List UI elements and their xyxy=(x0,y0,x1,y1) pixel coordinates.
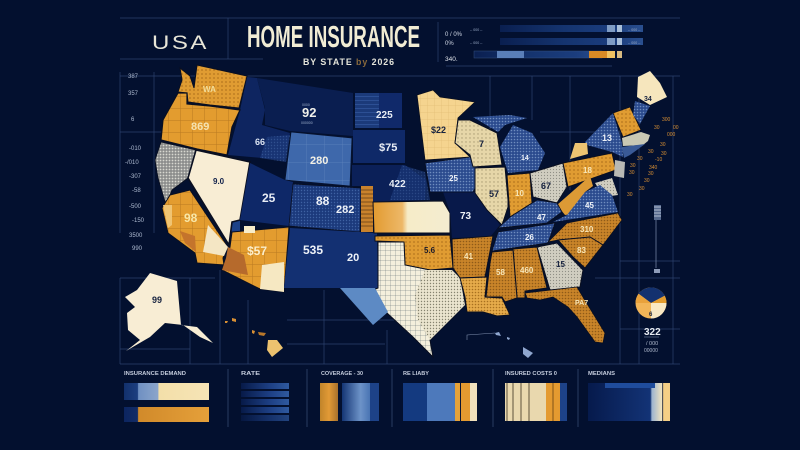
state: Mississippi xyxy=(486,250,517,302)
state: Kentucky: 47 xyxy=(537,213,546,222)
state: Washington: WA xyxy=(203,85,216,94)
state: New Mexico xyxy=(284,228,378,288)
state: Virginia: 45 xyxy=(585,201,594,210)
country label: USA xyxy=(152,33,209,54)
pie chart xyxy=(636,287,667,318)
top right range bars: 0% xyxy=(445,41,454,47)
legend: coverage xyxy=(320,371,379,421)
state: Minnesota xyxy=(417,90,475,160)
state: Texas xyxy=(340,242,465,357)
left axis labels: -58 xyxy=(132,188,141,194)
state: Montana xyxy=(257,78,353,136)
state: Montana: 92 xyxy=(302,105,316,120)
left axis labels: 357 xyxy=(128,91,139,97)
state: South Dakota xyxy=(353,130,405,163)
state: Virginia xyxy=(553,185,618,222)
pie value: / 000 xyxy=(646,341,658,347)
left axis labels: -/010 xyxy=(125,160,139,166)
state: Nevada: 9.0 xyxy=(213,177,225,186)
top right range bars: -- 000 -- xyxy=(470,41,483,45)
state: North Carolina xyxy=(548,213,622,245)
state: Arkansas xyxy=(452,236,493,278)
state: Maine xyxy=(633,71,667,124)
state: western New York strip xyxy=(570,143,588,159)
state: Colorado: 282 xyxy=(336,204,354,216)
state: South Carolina xyxy=(558,237,603,268)
state: Pennsylvania: 18 xyxy=(583,166,592,175)
state: New York: 13 xyxy=(602,133,612,143)
east coast callouts: 00 xyxy=(673,125,679,131)
east coast callouts: 000 xyxy=(667,132,676,138)
state: Washington xyxy=(178,65,247,108)
state: Iowa xyxy=(425,157,483,192)
state: Oklahoma xyxy=(375,235,453,270)
state: Tennessee: 26 xyxy=(525,233,534,242)
state: Nebraska xyxy=(352,165,430,202)
state: Louisiana xyxy=(460,277,510,316)
state: Missouri: 73 xyxy=(460,211,472,222)
top right range bars xyxy=(445,25,643,63)
subtitle: BY STATE by 2026 xyxy=(303,57,395,68)
state: Alabama xyxy=(513,247,547,298)
state: Pennsylvania xyxy=(563,153,616,187)
east coast callouts: 30 xyxy=(654,125,660,131)
left axis labels: 3500 xyxy=(129,233,143,239)
state: Indiana xyxy=(507,173,532,217)
state: Indiana: 10 xyxy=(515,189,524,198)
east coast callouts: 30 xyxy=(637,156,643,162)
east coast callouts: 30 xyxy=(630,163,636,169)
top right range bars: 0 / 0% xyxy=(445,32,463,38)
state: Kansas xyxy=(373,201,450,233)
east coast callouts: 30 xyxy=(644,178,650,184)
state: Missouri xyxy=(443,192,500,238)
state: Montana: 0000 xyxy=(302,103,310,107)
east coast callouts: 30 xyxy=(660,142,666,148)
top right range bars: -- 000 -- xyxy=(628,41,641,45)
top right range bars: 340. xyxy=(445,56,458,63)
east coast callouts: 300 xyxy=(662,117,671,123)
left axis labels xyxy=(125,74,145,252)
state: sliver of blue beside Nevada xyxy=(228,220,240,245)
state: Delaware and Maryland xyxy=(595,178,618,197)
state: Arizona: $57 xyxy=(247,244,267,258)
state: North Dakota xyxy=(355,93,402,128)
state: Vermont and New Hampshire xyxy=(613,107,641,137)
state: Alaska: 99 xyxy=(152,295,162,305)
state: New Mexico: 535 xyxy=(303,243,323,257)
state: Arizona xyxy=(222,226,289,292)
legend: coverage: COVERAGE - 30 xyxy=(321,371,363,377)
state: Connecticut xyxy=(622,144,645,158)
title block xyxy=(152,19,420,68)
state: North Dakota: 225 xyxy=(376,110,393,121)
state: Nevada xyxy=(188,150,250,245)
state: Arkansas: 41 xyxy=(464,252,473,261)
state: West Virginia xyxy=(557,176,593,215)
state: Southern California xyxy=(162,190,228,265)
left axis labels: -150 xyxy=(132,218,145,224)
grid lines xyxy=(120,18,680,364)
east coast callouts: 30 xyxy=(648,149,654,155)
state: Alabama: 460 xyxy=(520,266,534,275)
state: Colorado xyxy=(289,184,361,232)
left axis labels: -500 xyxy=(129,204,142,210)
state: Montana: 000000 xyxy=(301,121,313,125)
state: Illinois xyxy=(475,167,508,225)
state: Utah xyxy=(240,163,293,226)
state: Hawaii xyxy=(225,318,283,357)
state: New Mexico: 20 xyxy=(347,252,359,264)
legend: insurance premium: INSURANCE DEMAND xyxy=(124,371,186,377)
legend: insurance premium xyxy=(124,371,209,422)
east coast callouts xyxy=(627,117,679,198)
state: Utah: 25 xyxy=(262,191,276,205)
state: Michigan upper xyxy=(473,115,527,132)
state: Southern California: 98 xyxy=(184,211,198,225)
east coast callouts: 30 xyxy=(627,192,633,198)
state: North Carolina: 310 xyxy=(580,225,594,234)
state: Florida: PA7 xyxy=(575,300,588,307)
state: Kentucky xyxy=(498,200,562,228)
state: Oregon: 869 xyxy=(191,121,209,133)
state: Oregon xyxy=(161,93,240,155)
state: Iowa: 25 xyxy=(449,174,458,183)
left axis labels: 6 xyxy=(131,117,135,123)
state: Georgia xyxy=(537,243,583,290)
state: New Jersey xyxy=(614,160,625,178)
state: Illinois: 57 xyxy=(489,189,499,199)
pie value: 322 xyxy=(644,327,661,338)
left axis labels: -010 xyxy=(129,146,142,152)
state: Northern California xyxy=(155,142,196,205)
state: Idaho: 66 xyxy=(255,137,265,147)
east coast callouts: -10 xyxy=(655,157,662,163)
pie value xyxy=(644,327,661,354)
state: Maine: 34 xyxy=(644,96,652,103)
legend: rate xyxy=(241,371,289,421)
legend: insured costs: INSURED COSTS 0 xyxy=(505,371,557,377)
legend: liability: RE LIABY xyxy=(403,371,429,377)
left axis labels: -307 xyxy=(129,174,142,180)
main heading: HOME INSURANCE xyxy=(247,19,420,54)
state: Oklahoma: 5.6 xyxy=(424,246,436,255)
state: Idaho xyxy=(228,77,290,162)
legend: insured costs xyxy=(505,371,567,421)
east coast callouts: 30 xyxy=(661,151,667,157)
state: Michigan lower: 14 xyxy=(521,155,529,162)
state: South Carolina: 83 xyxy=(577,246,586,255)
islands: blue inset xyxy=(467,332,533,358)
state: New York xyxy=(585,113,623,157)
state: Wyoming: 280 xyxy=(310,155,328,167)
state: Florida xyxy=(525,287,605,343)
pie chart: 6 xyxy=(649,312,653,318)
top right range bars: -- 000 -- xyxy=(628,28,641,32)
state: Ohio xyxy=(530,163,567,203)
east coast callouts: 340 xyxy=(649,165,658,171)
east coast callouts: 30 xyxy=(629,170,635,176)
state: Ohio: 67 xyxy=(541,181,551,191)
pie value: 00000 xyxy=(644,348,658,354)
legend: median: MEDIANS xyxy=(588,371,615,377)
state: Wyoming xyxy=(285,132,352,186)
state: Nebraska: 422 xyxy=(389,179,406,190)
state: Georgia: 15 xyxy=(556,260,565,269)
state: Mississippi: 58 xyxy=(496,268,505,277)
east coast callouts: 30 xyxy=(648,171,654,177)
vertical scale xyxy=(654,205,661,273)
left axis labels: 387 xyxy=(128,74,139,80)
east coast callouts: 30 xyxy=(639,186,645,192)
top right range bars: -- 000 -- xyxy=(470,28,483,32)
state: Tennessee xyxy=(492,223,555,251)
state: Michigan lower xyxy=(500,125,545,173)
legend dividers xyxy=(228,369,578,427)
legend: median xyxy=(588,371,670,421)
state: Wisconsin: 7 xyxy=(479,139,484,149)
legend: rate: RATE xyxy=(241,371,260,377)
state: South Dakota: $75 xyxy=(379,142,397,154)
state: Massachusetts xyxy=(622,132,650,146)
state: Wisconsin xyxy=(455,120,502,167)
state: Colorado: 88 xyxy=(316,194,330,208)
left axis labels: 990 xyxy=(132,246,143,252)
state: Minnesota: $22 xyxy=(431,125,446,135)
panel: orange stripe border xyxy=(361,186,373,232)
legend: liability xyxy=(403,371,477,421)
state: Alaska xyxy=(125,273,213,351)
